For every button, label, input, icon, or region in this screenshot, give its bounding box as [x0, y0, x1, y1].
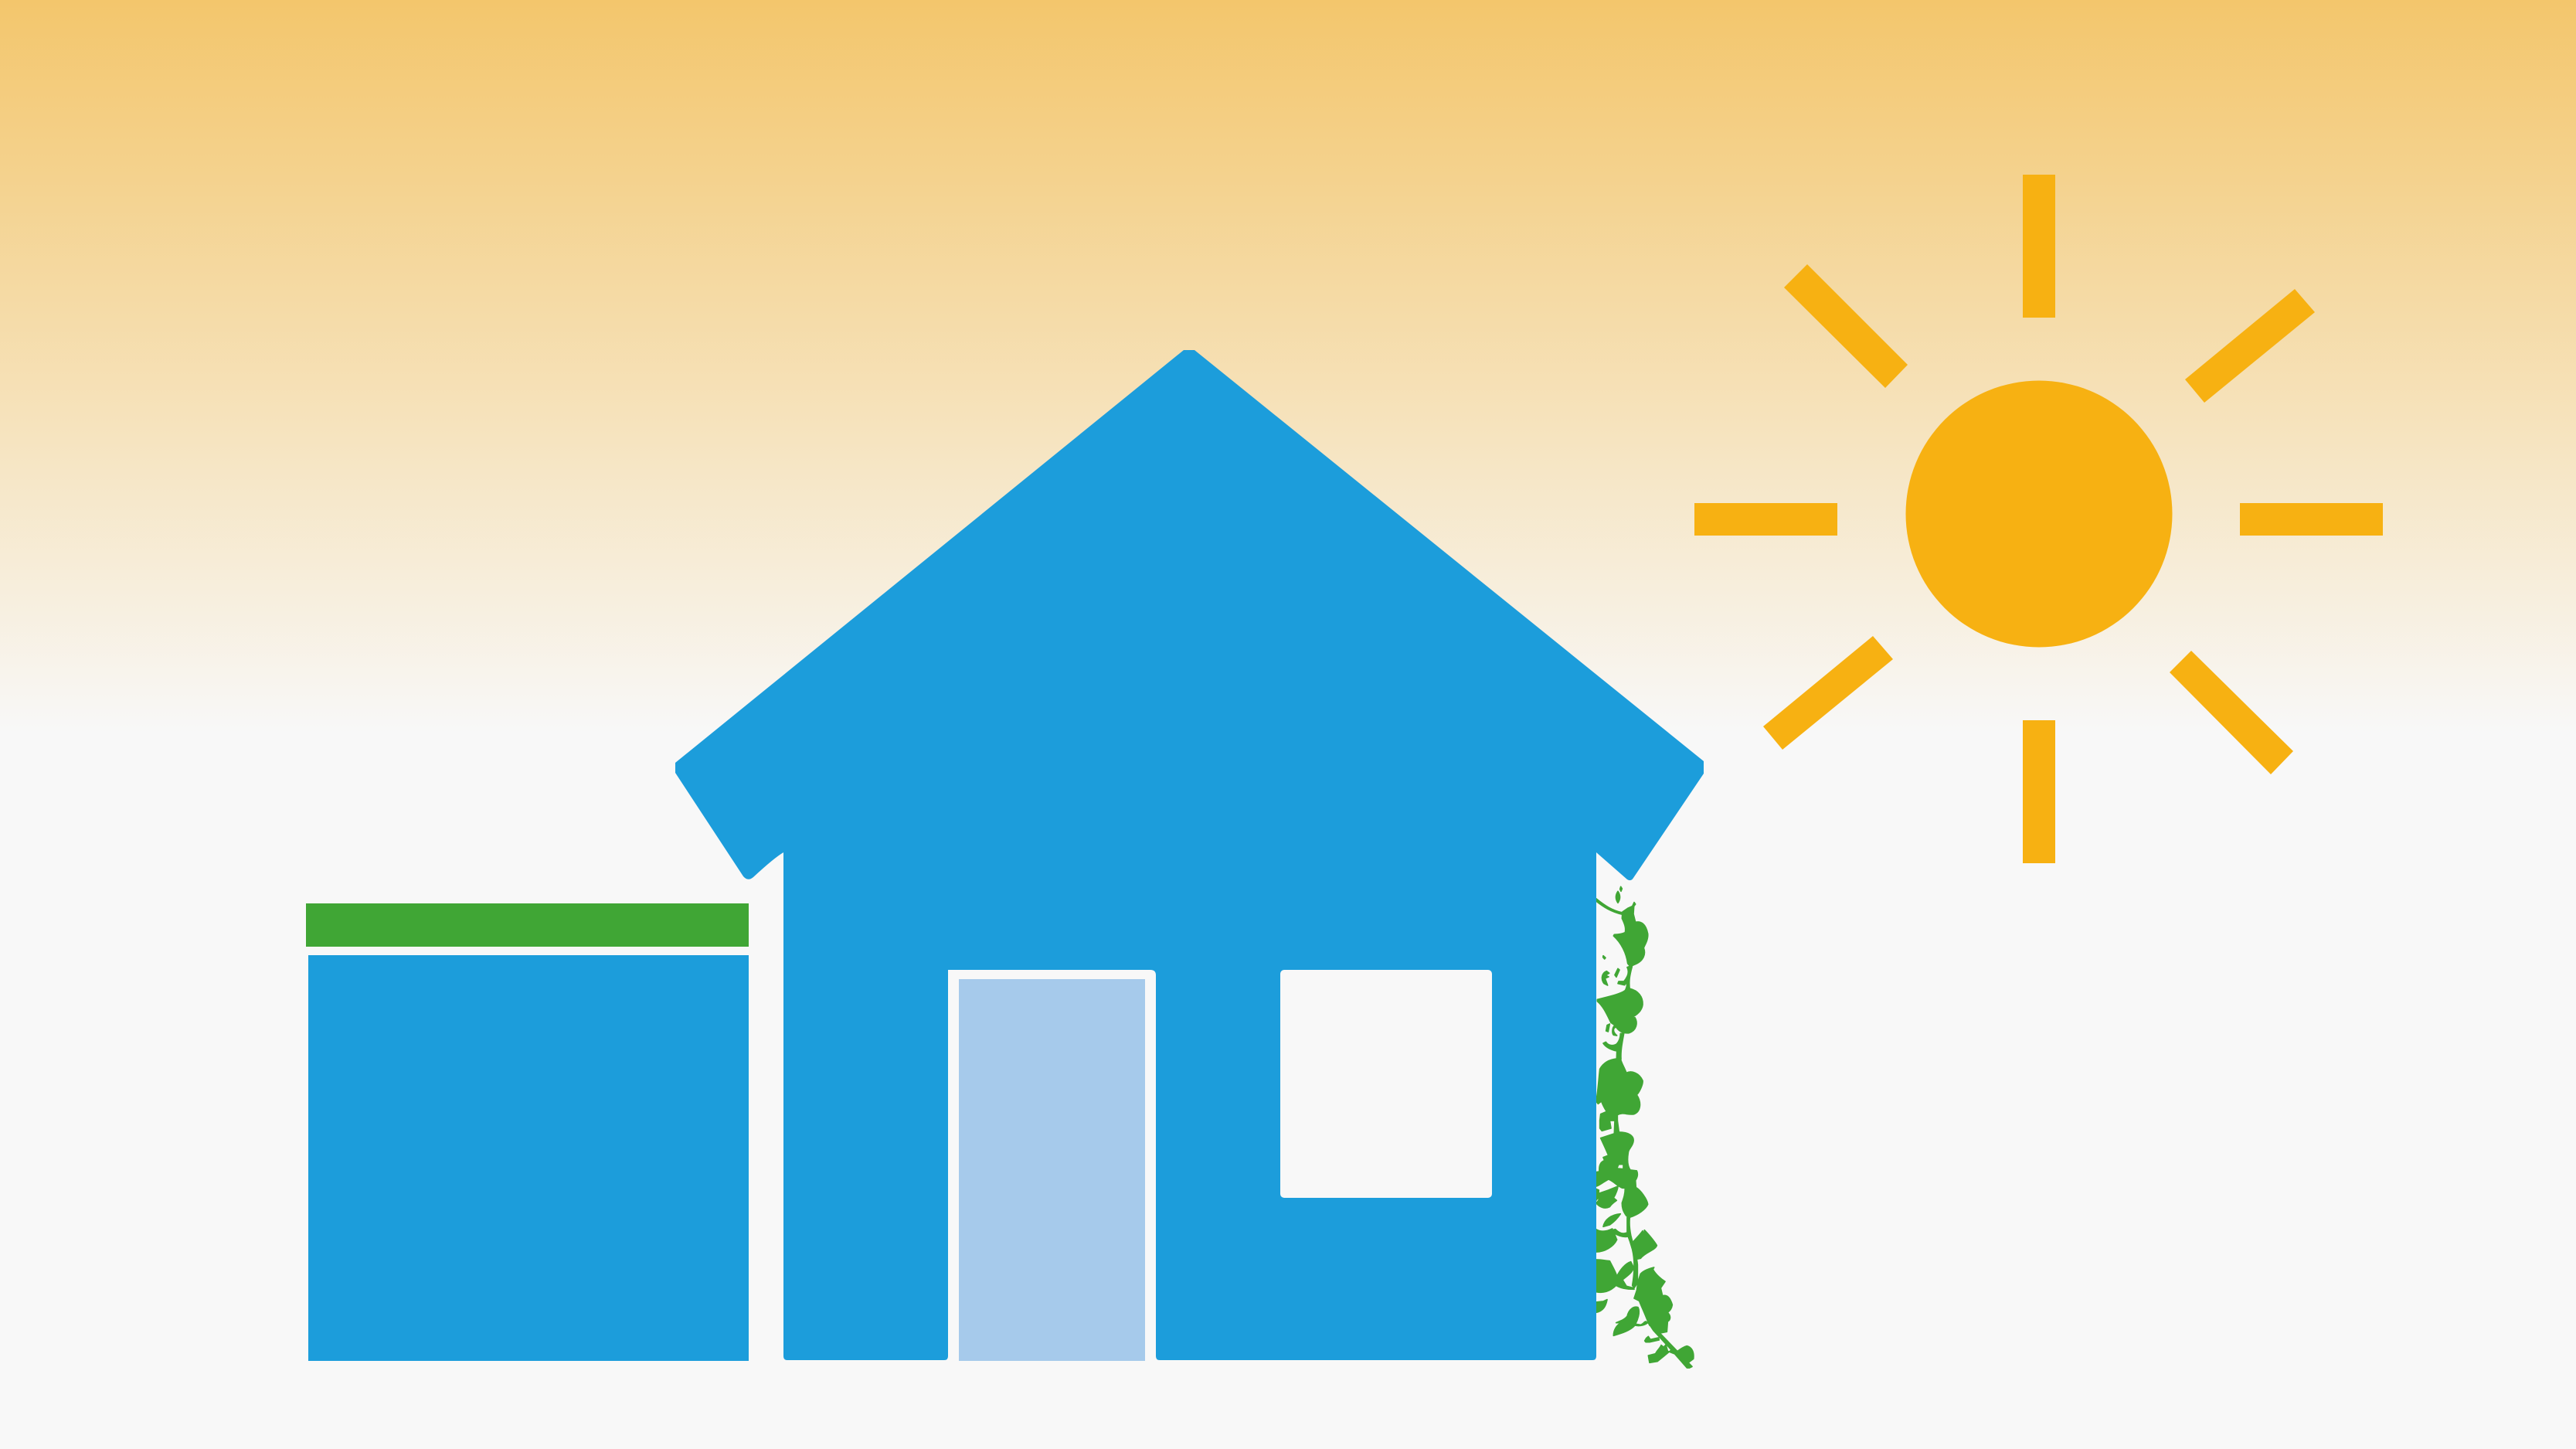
sun ray: south — [2023, 720, 2055, 863]
climbing vine — [1596, 886, 1694, 1368]
sun ray: north-east — [2185, 289, 2315, 403]
garage wall — [308, 955, 749, 1361]
sun ray: north — [2023, 175, 2055, 318]
icon: sun — [1694, 175, 2383, 863]
garage roof — [306, 903, 749, 947]
sun ray: north-west — [1784, 264, 1908, 388]
vine: upper section — [1596, 886, 1648, 1121]
sun disc — [1905, 380, 2173, 648]
background: sky gradient — [0, 0, 2576, 734]
door panel — [959, 979, 1145, 1361]
sun ray: south-east — [2170, 651, 2293, 774]
sun ray: west — [1694, 503, 1837, 536]
vine: lower section — [1596, 1121, 1694, 1368]
house silhouette with door opening — [675, 350, 1704, 1360]
sun ray: south-west — [1763, 636, 1893, 750]
window — [1280, 970, 1492, 1198]
sun ray: east — [2240, 503, 2383, 536]
